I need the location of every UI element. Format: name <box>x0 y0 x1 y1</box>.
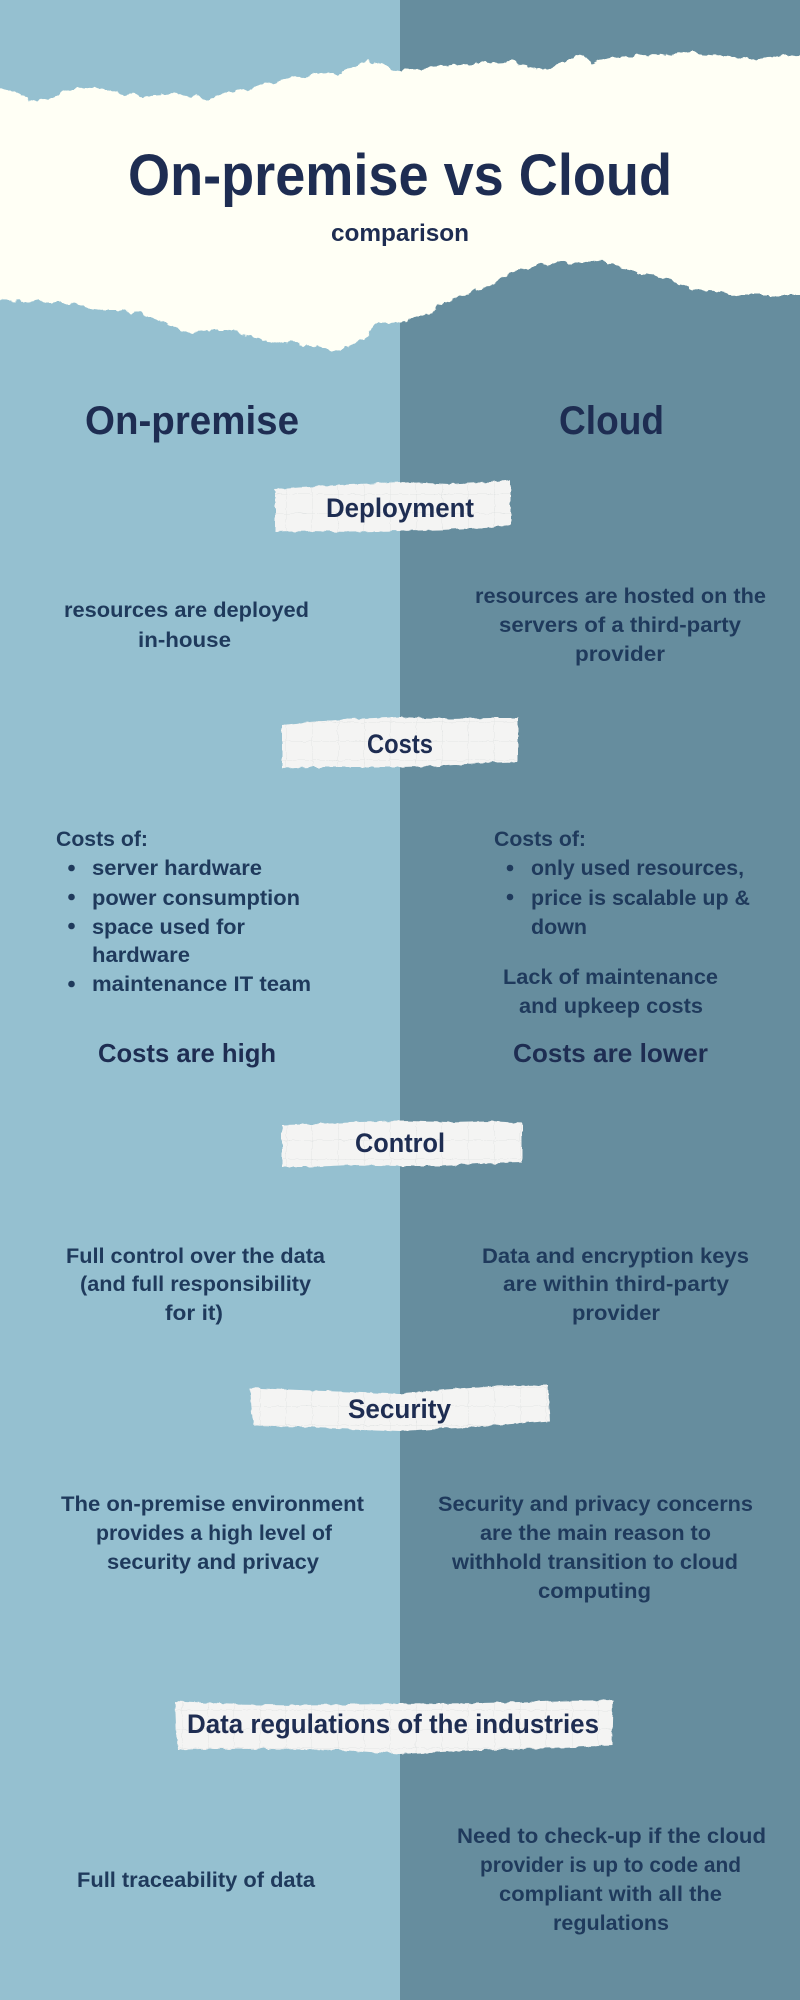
cloud costs list: Costs of: <box>494 828 586 851</box>
on-premise costs list: space used for <box>92 916 245 939</box>
section badge: costs <box>282 717 518 768</box>
cloud costs list <box>494 828 750 1018</box>
cloud security text: are the main reason to <box>480 1522 711 1545</box>
cloud deployment text: resources are hosted on the <box>475 585 766 608</box>
subtitle: comparison <box>331 220 469 247</box>
cloud costs verdict: Costs are lower <box>513 1038 708 1068</box>
section badge: deployment <box>275 480 511 532</box>
cloud deployment text: provider <box>575 643 665 666</box>
section badge: costs: Costs <box>367 729 433 759</box>
on-premise data regulations text: Full traceability of data <box>77 1869 315 1892</box>
on-premise costs list: server hardware <box>92 857 262 880</box>
on-premise deployment text <box>64 599 309 652</box>
on-premise costs list: maintenance IT team <box>92 973 311 996</box>
section badge: control <box>282 1121 522 1167</box>
background: cloud column <box>400 0 800 2000</box>
torn paper title banner <box>0 52 800 350</box>
on-premise costs list: hardware <box>92 944 190 967</box>
cloud costs list: Lack of maintenance <box>503 966 718 989</box>
cloud control text: are within third-party <box>503 1273 729 1296</box>
title: On-premise vs Cloud <box>128 143 672 208</box>
on-premise security text: The on-premise environment <box>61 1493 364 1516</box>
section badge: control: Control <box>355 1128 445 1158</box>
column heading: cloud: Cloud <box>559 399 664 443</box>
cloud security text: computing <box>538 1580 651 1603</box>
cloud costs list: down <box>531 916 587 939</box>
background: on-premise column <box>0 0 400 2000</box>
on-premise security text: provides a high level of <box>96 1522 333 1545</box>
section badge: data regulations: Data regulations of the industries <box>187 1709 599 1739</box>
section badge: security <box>250 1385 550 1431</box>
cloud costs list: and upkeep costs <box>519 995 703 1018</box>
cloud deployment text: servers of a third-party <box>499 614 741 637</box>
cloud security text: withhold transition to cloud <box>451 1551 738 1574</box>
section badge: security: Security <box>348 1394 451 1424</box>
on-premise control text: (and full responsibility <box>80 1273 311 1296</box>
cloud data regulations text: provider is up to code and <box>480 1854 741 1877</box>
cloud security text <box>438 1493 753 1603</box>
on-premise costs list <box>56 828 311 996</box>
on-premise security text: security and privacy <box>107 1551 319 1574</box>
cloud data regulations text: Need to check-up if the cloud <box>457 1825 766 1848</box>
cloud data regulations text <box>457 1825 766 1935</box>
on-premise security text <box>61 1493 364 1574</box>
on-premise costs list: power consumption <box>92 887 300 910</box>
cloud control text <box>482 1245 749 1325</box>
cloud control text: Data and encryption keys <box>482 1245 749 1268</box>
on-premise deployment text: in-house <box>138 629 231 652</box>
cloud data regulations text: compliant with all the <box>499 1883 722 1906</box>
section badge: data regulations <box>175 1700 613 1754</box>
on-premise deployment text: resources are deployed <box>64 599 309 622</box>
section badge: deployment: Deployment <box>326 493 474 523</box>
on-premise costs list: Costs of: <box>56 828 148 851</box>
cloud costs list: only used resources, <box>531 857 744 880</box>
on-premise control text: Full control over the data <box>66 1245 325 1268</box>
column heading: on-premise: On-premise <box>85 399 299 443</box>
cloud deployment text <box>475 585 766 666</box>
cloud data regulations text: regulations <box>553 1912 669 1935</box>
cloud control text: provider <box>572 1302 660 1325</box>
on-premise costs verdict: Costs are high <box>98 1038 276 1068</box>
cloud security text: Security and privacy concerns <box>438 1493 753 1516</box>
cloud costs list: price is scalable up & <box>531 887 750 910</box>
on-premise control text: for it) <box>165 1302 223 1325</box>
on-premise control text <box>66 1245 325 1325</box>
